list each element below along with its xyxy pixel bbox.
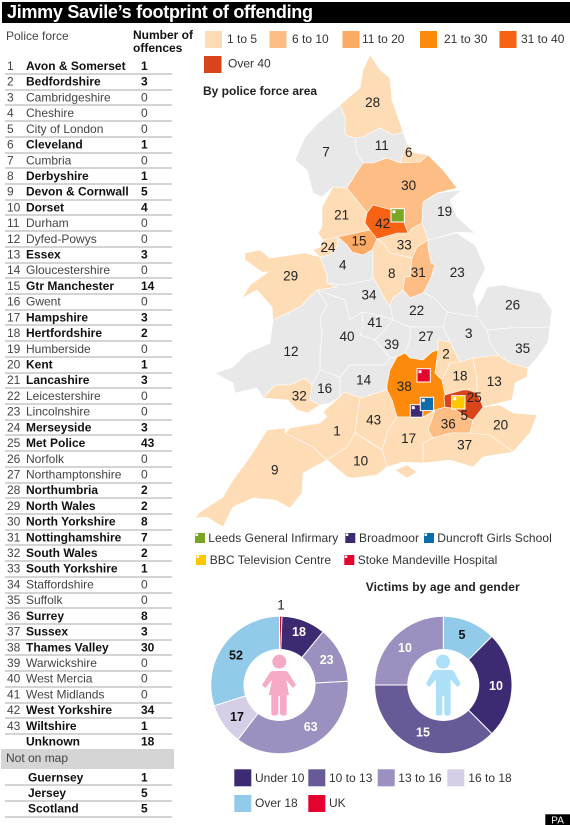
table: offences by police force: Dorset bbox=[26, 200, 64, 214]
map area numbers: 38 bbox=[397, 379, 412, 394]
table: offences by police force: 20 bbox=[7, 358, 21, 372]
map area numbers: 35 bbox=[515, 341, 530, 356]
map area numbers: 15 bbox=[351, 234, 367, 248]
table: offences by police force: 21 bbox=[7, 373, 21, 387]
map area numbers: 21 bbox=[334, 208, 349, 222]
table: offences by police force: Gloucestershire bbox=[26, 263, 110, 277]
table: offences by police force: 0 bbox=[141, 468, 148, 482]
table: offences by police force: 39 bbox=[7, 656, 21, 670]
table: offences by police force: 0 bbox=[141, 656, 148, 670]
table: offences by police force: 4 bbox=[141, 200, 148, 214]
not on map block: Scotland bbox=[28, 802, 79, 816]
table: offences by police force: 0 bbox=[141, 672, 148, 686]
legend: location markers bbox=[195, 531, 552, 567]
table header: Police force bbox=[6, 29, 69, 43]
map area numbers: 31 bbox=[411, 265, 426, 280]
map area numbers: 40 bbox=[339, 329, 355, 344]
table: offences by police force: 28 bbox=[7, 483, 21, 497]
map area numbers: 43 bbox=[366, 412, 381, 428]
table: offences by police force: Suffolk bbox=[26, 593, 63, 607]
table: offences by police force: 0 bbox=[141, 577, 148, 591]
table: offences by police force: 1 bbox=[141, 358, 148, 372]
map area numbers: 11 bbox=[375, 138, 389, 153]
table: offences by police force: Staffordshire bbox=[26, 577, 94, 591]
table: offences by police force: 0 bbox=[141, 389, 148, 403]
table: offences by police force: 0 bbox=[141, 232, 148, 246]
table: offences by police force: Lincolnshire bbox=[26, 405, 90, 419]
table: offences by police force: 11 bbox=[7, 216, 20, 230]
title bbox=[2, 2, 570, 23]
table: offences by police force: 33 bbox=[7, 562, 21, 576]
map area numbers: 41 bbox=[367, 315, 383, 330]
marker: Broadmoor bbox=[410, 405, 423, 417]
map area numbers: 23 bbox=[450, 265, 465, 280]
map area numbers: 16 bbox=[317, 381, 332, 396]
table: offences by police force: 0 bbox=[141, 216, 148, 230]
map area numbers: 30 bbox=[401, 178, 416, 193]
table: offences by police force: 5 bbox=[141, 185, 148, 199]
table: offences by police force: 1 bbox=[141, 562, 148, 576]
map area numbers: 18 bbox=[452, 368, 468, 384]
table: offences by police force: Hampshire bbox=[26, 310, 88, 324]
table: offences by police force: 7 bbox=[7, 153, 14, 167]
table: offences by police force: 35 bbox=[7, 593, 21, 607]
table: offences by police force: 8 bbox=[141, 515, 148, 529]
map of police force areas bbox=[195, 55, 552, 527]
legend: location markers: Stoke Mandeville Hospital bbox=[358, 553, 497, 567]
map area numbers: 25 bbox=[467, 390, 482, 405]
table: offences by police force: 0 bbox=[141, 153, 148, 167]
map area numbers: 13 bbox=[487, 374, 502, 389]
not on map block: 1 bbox=[141, 770, 148, 784]
table: offences by police force: Met Police bbox=[26, 436, 86, 450]
table: offences by police force: 29 bbox=[7, 499, 21, 513]
map legend: offence bands: Over 40 bbox=[228, 56, 271, 70]
donut chart: female victims: 63 bbox=[304, 720, 318, 734]
table: offences by police force: 1 bbox=[141, 169, 148, 183]
table: offences by police force: Warwickshire bbox=[26, 656, 97, 670]
table: offences by police force: 13 bbox=[7, 248, 21, 262]
table: offences by police force: Leicestershire bbox=[26, 389, 101, 403]
table: offences by police force: 0 bbox=[141, 90, 148, 104]
not on map block: Guernsey bbox=[28, 770, 84, 784]
table header: offences bbox=[133, 41, 183, 55]
map area numbers: 4 bbox=[339, 258, 347, 272]
table: offences by police force: 24 bbox=[7, 420, 21, 434]
legend: age groups: 10 to 13 bbox=[329, 771, 373, 785]
table: offences by police force: Northamptonshire bbox=[26, 468, 122, 482]
table: offences by police force: 0 bbox=[141, 593, 148, 607]
table: offences by police force: Nottinghamshire bbox=[26, 530, 122, 544]
legend: location markers: Broadmoor bbox=[359, 531, 419, 545]
table: offences by police force: 43 bbox=[7, 719, 21, 733]
table: offences by police force: West Mercia bbox=[26, 672, 93, 686]
table: offences by police force: 14 bbox=[141, 279, 155, 293]
table: offences by police force: 32 bbox=[7, 546, 21, 560]
map area numbers: 27 bbox=[418, 329, 434, 344]
table: offences by police force: 2 bbox=[7, 75, 14, 89]
table: offences by police force: City of London bbox=[26, 122, 103, 136]
table: offences by police force: 0 bbox=[141, 342, 148, 356]
map legend: offence bands: 1 to 5 bbox=[227, 32, 257, 46]
marker: BBC Television Centre bbox=[452, 396, 465, 409]
table: offences by police force: 34 bbox=[7, 577, 21, 591]
table: offences by police force: 0 bbox=[141, 263, 148, 277]
table: offences by police force: Cumbria bbox=[26, 153, 72, 167]
table: offences by police force: West Midlands bbox=[26, 687, 104, 701]
table: offences by police force: 0 bbox=[141, 405, 148, 419]
table: offences by police force: 16 bbox=[7, 295, 21, 309]
table: offences by police force: 0 bbox=[141, 106, 148, 120]
table: offences by police force: 0 bbox=[141, 452, 148, 466]
table: offences by police force: South Yorkshire bbox=[26, 562, 118, 576]
table: offences by police force: Northumbria bbox=[26, 483, 98, 497]
table: offences by police force: 41 bbox=[7, 687, 21, 701]
table: offences by police force: 8 bbox=[141, 609, 148, 623]
map area numbers: 2 bbox=[442, 346, 450, 362]
map area numbers: 17 bbox=[401, 431, 416, 446]
legend: age groups: UK bbox=[329, 796, 346, 810]
map legend: offence bands: 31 to 40 bbox=[521, 32, 565, 46]
icon: male figure bbox=[426, 655, 461, 716]
table: offences by police force: North Yorkshire bbox=[26, 515, 116, 529]
donut chart: male victims: 5 bbox=[459, 628, 466, 642]
map legend: offence bands: 21 to 30 bbox=[444, 32, 488, 46]
table header: Number of bbox=[133, 28, 194, 42]
table: offences by police force: Norfolk bbox=[26, 452, 65, 466]
map area numbers: 5 bbox=[461, 408, 468, 423]
table: offences by police force: Hertfordshire bbox=[26, 326, 102, 340]
icon: female figure bbox=[262, 655, 296, 716]
table: offences by police force: 5 bbox=[7, 122, 14, 136]
table: offences by police force: Thames Valley bbox=[26, 640, 109, 654]
table: offences by police force: Wiltshire bbox=[26, 719, 77, 733]
map area numbers: 20 bbox=[493, 418, 508, 432]
table: offences by police force: Sussex bbox=[26, 625, 68, 639]
table: offences by police force: Lancashire bbox=[26, 373, 90, 387]
table: offences by police force: 26 bbox=[7, 452, 21, 466]
table: offences by police force bbox=[5, 59, 172, 748]
table: offences by police force: Dyfed-Powys bbox=[26, 232, 97, 246]
legend: age groups: Over 18 bbox=[255, 796, 298, 810]
table: offences by police force: 37 bbox=[7, 625, 21, 639]
table: offences by police force: 22 bbox=[7, 389, 21, 403]
table: offences by police force: Unknown bbox=[26, 734, 80, 748]
donut chart: female victims: 18 bbox=[292, 625, 306, 639]
table: offences by police force: 38 bbox=[7, 640, 21, 654]
table: offences by police force: 3 bbox=[141, 373, 148, 387]
map area numbers: 19 bbox=[437, 204, 452, 219]
map legend: offence bands: 11 to 20 bbox=[362, 32, 405, 46]
table: offences by police force: Bedfordshire bbox=[26, 75, 101, 89]
table: offences by police force: Kent bbox=[26, 358, 53, 372]
table: offences by police force: 0 bbox=[141, 295, 148, 309]
map area numbers: 12 bbox=[283, 344, 299, 359]
table header bbox=[6, 28, 194, 55]
table: offences by police force: Surrey bbox=[26, 609, 64, 623]
donut chart: female victims bbox=[211, 598, 348, 754]
map area numbers: 34 bbox=[361, 288, 377, 302]
map area numbers: 39 bbox=[384, 337, 399, 352]
map area numbers: 8 bbox=[388, 266, 395, 281]
table: offences by police force: Avon & Somerset bbox=[26, 59, 126, 73]
table: offences by police force: West Yorkshire bbox=[26, 703, 112, 717]
table: offences by police force: 3 bbox=[141, 75, 148, 89]
donut chart: male victims: 10 bbox=[489, 679, 503, 693]
table: offences by police force: 18 bbox=[141, 734, 155, 748]
table: offences by police force: 2 bbox=[141, 483, 148, 497]
table: offences by police force: 1 bbox=[141, 59, 148, 73]
legend: age groups: 16 to 18 bbox=[468, 771, 512, 785]
table: offences by police force: Cleveland bbox=[26, 138, 83, 152]
legend: age groups: 13 to 16 bbox=[398, 771, 442, 785]
map area numbers: 10 bbox=[353, 454, 368, 468]
donut chart: female victims: 23 bbox=[320, 653, 334, 667]
table: offences by police force: 8 bbox=[7, 169, 14, 183]
donut chart: male victims: 15 bbox=[416, 726, 430, 740]
map area numbers: 9 bbox=[271, 462, 278, 478]
marker: Leeds General Infirmary bbox=[391, 209, 404, 222]
table: offences by police force: 14 bbox=[7, 263, 21, 277]
donut chart: male victims: 10 bbox=[398, 641, 412, 655]
map area numbers bbox=[271, 95, 530, 477]
map area numbers: 32 bbox=[292, 388, 307, 404]
donut chart: female victims: 17 bbox=[230, 710, 244, 724]
table: offences by police force: 4 bbox=[7, 106, 14, 120]
table: offences by police force: Devon & Cornwall bbox=[26, 185, 129, 199]
map area numbers: 1 bbox=[333, 424, 341, 438]
marker: Stoke Mandeville Hospital bbox=[417, 369, 430, 382]
legend: location markers: BBC Television Centre bbox=[210, 553, 331, 567]
table: offences by police force: 2 bbox=[141, 326, 148, 340]
legend: location markers: Duncroft Girls School bbox=[437, 531, 552, 545]
table: offences by police force: Essex bbox=[26, 248, 61, 262]
map area numbers: 24 bbox=[320, 240, 336, 255]
table: offences by police force: 31 bbox=[7, 530, 21, 544]
title: Jimmy Savile’s footprint of offending bbox=[7, 2, 313, 22]
not on map block: Jersey bbox=[28, 786, 66, 800]
map area numbers: 3 bbox=[465, 326, 472, 341]
table: offences by police force: 17 bbox=[7, 310, 21, 324]
map area numbers: 14 bbox=[356, 372, 372, 388]
marker: Duncroft Girls School bbox=[420, 397, 434, 411]
table: offences by police force: 23 bbox=[7, 405, 21, 419]
table: offences by police force: 19 bbox=[7, 342, 21, 356]
table: offences by police force: 2 bbox=[141, 499, 148, 513]
table: offences by police force: 43 bbox=[141, 436, 155, 450]
table: offences by police force: 6 bbox=[7, 138, 14, 152]
table: offences by police force: 36 bbox=[7, 609, 21, 623]
table: offences by police force: 0 bbox=[141, 122, 148, 136]
map area numbers: 26 bbox=[505, 298, 520, 312]
table: offences by police force: Durham bbox=[26, 216, 69, 230]
not on map block: 5 bbox=[141, 786, 148, 800]
table: offences by police force: 3 bbox=[7, 90, 14, 104]
map legend: offence bands bbox=[204, 31, 565, 73]
table: offences by police force: South Wales bbox=[26, 546, 98, 560]
table: offences by police force: 9 bbox=[7, 185, 14, 199]
table: offences by police force: Cambridgeshire bbox=[26, 90, 111, 104]
table: offences by police force: 1 bbox=[141, 138, 148, 152]
table: offences by police force: 40 bbox=[7, 672, 21, 686]
legend: age groups bbox=[234, 769, 512, 812]
table: offences by police force: Derbyshire bbox=[26, 169, 89, 183]
not on map block: Not on map bbox=[6, 751, 68, 765]
table: offences by police force: 3 bbox=[141, 310, 148, 324]
legend: age groups: Under 10 bbox=[255, 771, 305, 785]
map subheading: By police force area bbox=[203, 84, 317, 98]
table: offences by police force: Cheshire bbox=[26, 106, 74, 120]
table: offences by police force: 15 bbox=[7, 279, 21, 293]
map area numbers: 37 bbox=[457, 438, 472, 452]
map area numbers: 29 bbox=[283, 268, 298, 284]
donut heading: Victims by age and gender bbox=[366, 580, 520, 594]
not on map block bbox=[1, 749, 174, 817]
table: offences by police force: 12 bbox=[7, 232, 21, 246]
table: offences by police force: 3 bbox=[141, 248, 148, 262]
table: offences by police force: 0 bbox=[141, 687, 148, 701]
table: offences by police force: 3 bbox=[141, 625, 148, 639]
map legend: offence bands: 6 to 10 bbox=[292, 32, 329, 46]
map area numbers: 22 bbox=[409, 303, 424, 318]
legend: location markers: Leeds General Infirmary bbox=[208, 531, 338, 545]
donut chart: female victims: 52 bbox=[229, 649, 243, 663]
table: offences by police force: 18 bbox=[7, 326, 21, 340]
table: offences by police force: 2 bbox=[141, 546, 148, 560]
table: offences by police force: 30 bbox=[141, 640, 155, 654]
map area numbers: 28 bbox=[365, 95, 380, 110]
table: offences by police force: Merseyside bbox=[26, 420, 92, 434]
map area numbers: 7 bbox=[322, 144, 330, 160]
table: offences by police force: 7 bbox=[141, 530, 148, 544]
map area numbers: 6 bbox=[405, 145, 412, 160]
table: offences by police force: 1 bbox=[7, 59, 14, 73]
not on map block: 5 bbox=[141, 802, 148, 816]
table: offences by police force: 42 bbox=[7, 703, 21, 717]
table: offences by police force: North Wales bbox=[26, 499, 96, 513]
table: offences by police force: Humberside bbox=[26, 342, 91, 356]
table: offences by police force: 1 bbox=[141, 719, 148, 733]
table: offences by police force: 10 bbox=[7, 200, 21, 214]
table: offences by police force: 34 bbox=[141, 703, 155, 717]
table: offences by police force: 30 bbox=[7, 515, 21, 529]
PA credit bbox=[545, 814, 570, 825]
table: offences by police force: 25 bbox=[7, 436, 21, 450]
table: offences by police force: 3 bbox=[141, 420, 148, 434]
map area numbers: 33 bbox=[397, 238, 412, 252]
map area numbers: 36 bbox=[441, 416, 456, 432]
table: offences by police force: 27 bbox=[7, 468, 21, 482]
donut chart: male victims bbox=[375, 616, 512, 754]
table: offences by police force: Gwent bbox=[26, 295, 61, 309]
map area numbers: 42 bbox=[375, 216, 390, 231]
table: offences by police force: Gtr Manchester bbox=[26, 279, 114, 293]
donut chart: female victims: 1 bbox=[277, 598, 285, 612]
